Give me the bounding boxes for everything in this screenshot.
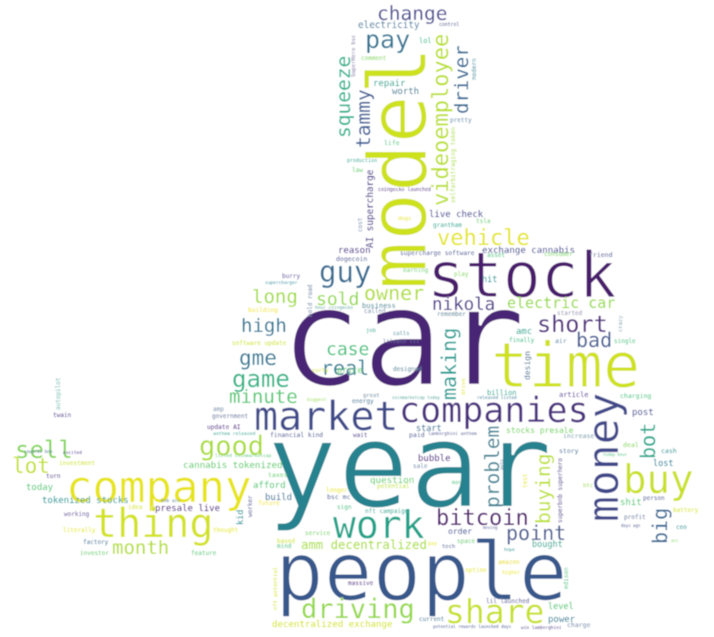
small words: lower centre: decentralized exchange xyxy=(272,620,392,630)
word: electric car: electric car xyxy=(507,294,615,312)
word: nikola: nikola xyxy=(432,295,495,315)
small words: head and torso: dogecoin xyxy=(336,255,367,263)
small words: right side: hope xyxy=(504,547,515,553)
small words: left side: future xyxy=(258,500,280,507)
small words: left side: turn xyxy=(46,473,61,480)
word: change: change xyxy=(377,2,447,25)
word: long: long xyxy=(252,286,298,308)
word: owner: owner xyxy=(364,281,424,305)
small words: head and torso: pretty xyxy=(450,117,472,124)
small words: lower centre: option xyxy=(465,567,487,574)
small words: head and torso: electricity xyxy=(358,20,420,31)
small words: lower centre: start xyxy=(416,424,442,434)
small words: head and torso: comment xyxy=(361,55,387,62)
small words: head and torso: worth xyxy=(392,87,419,97)
word: driver: driver xyxy=(451,45,473,114)
small words: left side: twain xyxy=(53,412,71,419)
small words: left side: energy xyxy=(352,398,374,405)
word: good: good xyxy=(199,431,264,462)
small words: left side: lilcoin lil xyxy=(383,339,419,345)
small words: left side: rewards bnb xyxy=(24,449,53,455)
small words: head and torso: law xyxy=(352,167,363,174)
word: buy: buy xyxy=(623,458,693,503)
small words: head and torso: asset xyxy=(487,252,505,259)
small words: lower centre: space xyxy=(457,538,475,545)
small words: right side: test xyxy=(522,473,529,488)
word: gme: gme xyxy=(239,346,277,370)
small words: lower centre: sign xyxy=(337,504,352,511)
small words: lower centre: man xyxy=(452,480,461,486)
small words: head and torso: dogs xyxy=(398,216,411,222)
small words: head and torso: supercharge software xyxy=(400,250,475,257)
small words: lower centre: amm decentralized xyxy=(301,538,427,552)
small words: left side: hold road xyxy=(307,284,314,317)
small words: left side: literally xyxy=(63,527,96,534)
word: point: point xyxy=(506,521,566,545)
word: game: game xyxy=(232,365,290,393)
small words: head and torso: modern xyxy=(471,58,478,80)
small words: head and torso: single xyxy=(614,338,636,345)
small words: head and torso: control xyxy=(439,22,459,28)
small words: left side: worker xyxy=(247,495,254,517)
small words: right side: moving xyxy=(483,525,498,530)
small words: left side: excited xyxy=(63,450,82,456)
small words: head and torso: business xyxy=(362,302,396,310)
small words: lower centre: potential rewards launched days xyxy=(433,624,512,629)
word: short: short xyxy=(537,310,608,338)
small words: left side: thought xyxy=(213,527,239,534)
word: companies: companies xyxy=(399,391,589,431)
small words: left side: drive xyxy=(461,378,467,395)
small words: head and torso: life xyxy=(384,139,400,147)
small words: left side: early xyxy=(312,368,329,374)
small words: left side: designed xyxy=(393,366,422,373)
word: big: big xyxy=(648,508,672,544)
small words: lower centre: potential xyxy=(377,483,410,490)
word: vehicle: vehicle xyxy=(437,226,530,251)
small words: lower centre: wait xyxy=(353,432,368,439)
small words: left side: burry xyxy=(282,273,300,280)
small words: lower centre: paid xyxy=(409,431,425,439)
small words: left side: kid xyxy=(236,510,246,525)
small words: left side xyxy=(24,273,467,557)
small words: lower centre: pay xyxy=(428,541,437,547)
small words: lower centre: bsc mc xyxy=(327,493,351,501)
small words: right side: deal xyxy=(623,441,639,449)
word: tammy: tammy xyxy=(352,89,375,148)
word: problem: problem xyxy=(481,426,504,508)
small words: right side: today hour xyxy=(603,452,628,457)
small words: right side: ceo xyxy=(676,524,687,531)
small words: head and torso: crazy xyxy=(618,315,624,332)
word: buying: buying xyxy=(532,454,555,524)
small words: head and torso: AI supercharge xyxy=(365,169,376,248)
word: real: real xyxy=(321,356,369,380)
small words: lower centre: nft potential xyxy=(273,567,279,610)
small words: right side: btc xyxy=(583,483,593,489)
small words: left side: afford xyxy=(253,481,286,491)
small words: right side: edison xyxy=(563,567,570,589)
small words: lower centre: lamborghini anthem xyxy=(428,431,477,437)
small words: head and torso: lol xyxy=(419,37,432,45)
small words: lower centre: order xyxy=(448,527,472,536)
small words: left side: presale live xyxy=(155,504,220,514)
small words: head and torso: selfarbitraging token xyxy=(450,127,457,203)
word: work: work xyxy=(333,503,425,547)
small words: head and torso: calls xyxy=(393,331,410,337)
small words: lower centre: longer xyxy=(326,487,348,494)
small words: head and torso: grantham xyxy=(433,222,462,229)
small words: head and torso: called xyxy=(364,308,386,315)
small words: right side: days ago xyxy=(621,523,641,528)
small words: left side: hour coingecko xyxy=(315,305,353,311)
small words: left side: building xyxy=(248,307,278,314)
small words: left side: financial kind xyxy=(270,432,323,439)
small words: lower centre: nft campaign xyxy=(365,508,409,515)
small words: left side: working xyxy=(64,511,90,518)
small words: left side: biggest xyxy=(307,397,327,403)
small words: head and torso: exchange cannabis xyxy=(482,246,575,256)
small words: right side: uni xyxy=(671,538,679,543)
small words: head and torso: amc xyxy=(516,327,532,337)
small words: lower centre: mind xyxy=(277,543,292,550)
small words: right side: bought xyxy=(532,540,563,550)
small words: head and torso: remember xyxy=(437,311,466,318)
small words: left side: great xyxy=(363,393,380,399)
small words: head and torso xyxy=(336,20,636,380)
small words: head and torso: design xyxy=(523,351,532,380)
small words: left side: autopilot xyxy=(55,377,62,410)
small words: head and torso: tsla xyxy=(476,218,491,225)
word: driving: driving xyxy=(301,594,415,625)
small words: head and torso: job xyxy=(366,328,376,334)
small words: left side: amp xyxy=(213,406,224,413)
word: sell: sell xyxy=(15,436,73,464)
small words: lower centre: tech xyxy=(442,544,455,550)
word: videoemployee: videoemployee xyxy=(429,34,454,206)
small words: head and torso: live check xyxy=(429,210,484,220)
small words: right side: auto xyxy=(499,459,505,470)
small words: right side: charging xyxy=(620,392,651,400)
small words: left side: taxes xyxy=(268,471,288,479)
word: pay: pay xyxy=(365,25,410,54)
word: time: time xyxy=(491,329,640,402)
small words: right side: level xyxy=(548,602,574,612)
word: car: car xyxy=(280,260,526,418)
word: people: people xyxy=(275,526,568,620)
word: high: high xyxy=(241,315,287,337)
small words: lower centre: massive xyxy=(348,580,374,587)
small words: head and torso: friend xyxy=(589,251,613,259)
small words: right side: person xyxy=(643,495,665,502)
small words: head and torso: earning xyxy=(403,267,429,274)
small words: lower centre: service xyxy=(305,530,331,537)
word: thing: thing xyxy=(93,501,213,547)
word: stock: stock xyxy=(427,239,617,312)
small words: lower centre: question xyxy=(370,475,414,486)
small words: right side: article xyxy=(559,391,589,399)
small words: right side: amazon xyxy=(498,559,520,566)
small words: left side: bnb ain xyxy=(161,498,180,504)
word: guy: guy xyxy=(319,255,371,289)
small words: right side: profit xyxy=(624,514,646,521)
small words: head and torso: finally xyxy=(509,337,535,344)
small words: right side: post xyxy=(632,408,654,418)
word: case: case xyxy=(326,339,369,360)
small words: right side: battery xyxy=(673,507,699,514)
word: month: month xyxy=(112,537,169,559)
small words: left side: investor xyxy=(80,550,109,557)
word: model: model xyxy=(352,46,446,290)
small words: left side: coinmarketcap today xyxy=(392,395,440,400)
small words: lower centre: based xyxy=(277,538,295,545)
word: money: money xyxy=(579,393,629,522)
small words: head and torso: coingecko launched xyxy=(378,187,431,193)
small words: left side: software update xyxy=(232,340,287,347)
small words: left side: build xyxy=(265,493,292,503)
small words: right side: stocks presale xyxy=(506,426,574,435)
small words: head and torso: hit xyxy=(482,275,497,285)
word: year: year xyxy=(266,398,553,536)
small words: right side: lost xyxy=(653,459,673,469)
word: share: share xyxy=(445,592,544,631)
small words: left side: feature xyxy=(191,550,217,557)
small words: right side: win lamborghini xyxy=(521,625,562,631)
small words: left side: tokenized stocks xyxy=(42,496,129,506)
word: making: making xyxy=(437,328,461,400)
small words: lower centre: bubble xyxy=(418,454,451,464)
small words: right side: increase xyxy=(563,432,594,440)
small words: left side: update AI xyxy=(207,424,241,431)
small words: left side: price xyxy=(337,366,363,376)
small words: head and torso: SuperHero bsc xyxy=(351,35,357,77)
word: bitcoin: bitcoin xyxy=(436,506,529,531)
small words: left side: today xyxy=(26,483,54,493)
small words: head and torso: play xyxy=(454,271,469,278)
small words: right side: lil launched xyxy=(486,598,530,605)
small words: right side: released listed xyxy=(477,395,517,401)
small words: left side: cannabis tokenized xyxy=(183,460,283,471)
small words: head and torso: production xyxy=(347,158,377,164)
small words: left side: investment xyxy=(59,460,96,467)
word: sold: sold xyxy=(316,289,359,310)
small words: right side: power xyxy=(548,615,576,625)
small words: left side: idea xyxy=(128,504,143,511)
small words: head and torso: cost xyxy=(357,217,364,232)
small words: head and torso: reason xyxy=(338,246,371,256)
word: minute: minute xyxy=(229,386,298,408)
word: bot: bot xyxy=(636,423,660,459)
small words: right side: story xyxy=(559,447,579,455)
small words: left side: anthem released xyxy=(213,431,256,437)
small words: left side: government xyxy=(212,413,249,420)
word: company: company xyxy=(66,462,251,513)
word: squeeze: squeeze xyxy=(332,56,355,138)
small words: head and torso: started xyxy=(557,310,583,317)
small words: right side: shit xyxy=(620,498,642,508)
small words: left side: listed coinmarketcap xyxy=(215,453,272,459)
small words: right side: charge xyxy=(567,621,591,629)
small words: lower centre xyxy=(272,424,512,630)
small words: head and torso: air xyxy=(555,337,567,345)
word: lot: lot xyxy=(12,454,50,478)
small words: head and torso: consumer xyxy=(544,251,573,258)
small words: right side: higher xyxy=(502,570,520,576)
small words: lower centre: current xyxy=(419,616,445,623)
small words: head and torso: repair xyxy=(373,79,406,89)
small words: right side xyxy=(477,389,699,631)
word: market: market xyxy=(254,394,398,440)
small words: lower centre: sale xyxy=(413,463,428,470)
small words: left side: supercharger xyxy=(265,280,298,286)
small words: right side: cash xyxy=(661,447,677,455)
small words: left side: factory xyxy=(83,539,109,546)
small words: right side: superbnb superhero xyxy=(557,458,564,523)
small words: right side: billion xyxy=(487,389,517,397)
word: bad: bad xyxy=(576,328,612,352)
